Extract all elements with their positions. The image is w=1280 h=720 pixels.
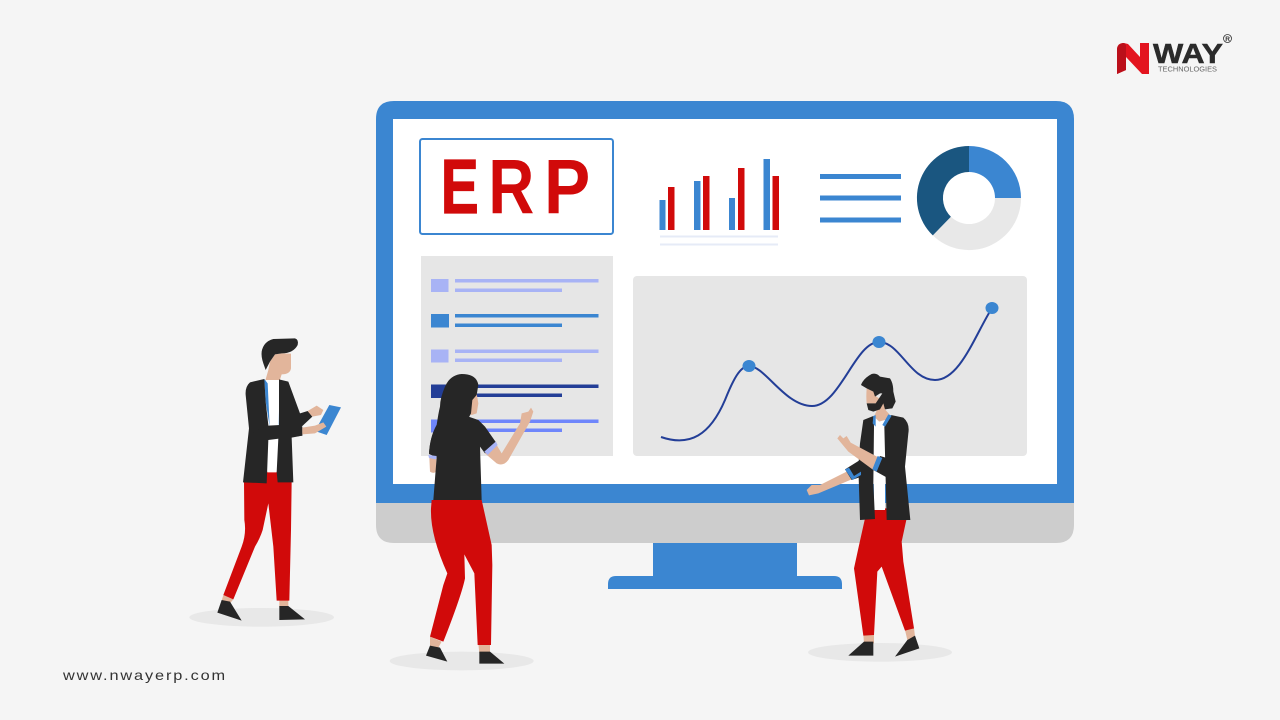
shoes — [217, 600, 305, 621]
panel: line chart — [633, 276, 1027, 456]
head and neck — [265, 353, 291, 382]
jacket left panel — [858, 416, 875, 520]
white shirt — [873, 417, 885, 510]
logo: Nway Technologies — [1117, 34, 1232, 74]
bar chart — [660, 159, 779, 246]
tablet — [315, 405, 341, 435]
face — [468, 393, 478, 415]
hair — [262, 338, 298, 370]
list row 5 — [431, 420, 598, 432]
upper forearm — [837, 435, 878, 470]
list row 4 — [431, 384, 598, 398]
black top — [429, 416, 497, 500]
lower arm — [807, 472, 852, 495]
data points — [742, 302, 998, 372]
registered mark: R — [1225, 36, 1230, 43]
jacket left panel — [243, 379, 268, 483]
crossed arm — [253, 425, 302, 440]
ground shadow — [189, 608, 334, 627]
list row 1 — [431, 279, 598, 292]
red trousers — [223, 472, 292, 601]
arms — [429, 408, 533, 473]
red trousers — [854, 508, 914, 636]
person: man with tablet — [189, 338, 341, 627]
red trousers — [430, 500, 492, 645]
white shirt — [266, 380, 280, 472]
ground shadow — [390, 652, 534, 670]
shoes — [426, 646, 504, 664]
ankles — [863, 628, 915, 643]
ERP heading: R — [488, 143, 534, 229]
website url: www.nwayerp.com — [62, 667, 227, 683]
monitor stand — [608, 540, 842, 589]
cuffs and collar — [845, 414, 892, 480]
list row 2 — [431, 314, 598, 328]
jacket right panel — [277, 379, 312, 482]
ankles — [430, 637, 490, 653]
icon: red N mark — [1117, 43, 1149, 74]
long hair — [429, 374, 478, 453]
list row 3 — [431, 350, 598, 362]
ankles — [222, 595, 288, 607]
shoes — [848, 636, 919, 657]
hands — [302, 406, 326, 434]
elbow sleeve — [845, 460, 862, 480]
logo subtitle: TECHNOLOGIES — [1158, 66, 1217, 74]
monitor frame — [376, 101, 1074, 503]
upper body — [807, 374, 910, 520]
monitor chin — [376, 500, 1074, 543]
person: woman pointing — [390, 374, 534, 670]
blue collar — [264, 379, 283, 427]
upper body — [428, 374, 533, 500]
legend lines — [820, 174, 901, 222]
neck and face — [866, 388, 890, 426]
donut chart — [917, 146, 1021, 250]
panel: list — [421, 256, 613, 456]
trend line — [661, 308, 992, 440]
upper body — [243, 338, 341, 483]
ERP heading — [441, 143, 590, 230]
monitor — [376, 101, 1074, 589]
hair and beard — [861, 374, 896, 412]
sleeve cuffs — [428, 442, 498, 459]
monitor screen — [393, 119, 1057, 484]
ERP heading: P — [544, 144, 590, 230]
ERP heading: E — [441, 145, 479, 230]
logo wordmark: WAY — [1153, 38, 1223, 69]
ERP title box — [420, 139, 613, 234]
ground shadow — [808, 643, 952, 662]
person: bearded man gesturing — [807, 374, 952, 662]
jacket right panel — [884, 415, 910, 520]
right sleeve — [873, 456, 905, 478]
